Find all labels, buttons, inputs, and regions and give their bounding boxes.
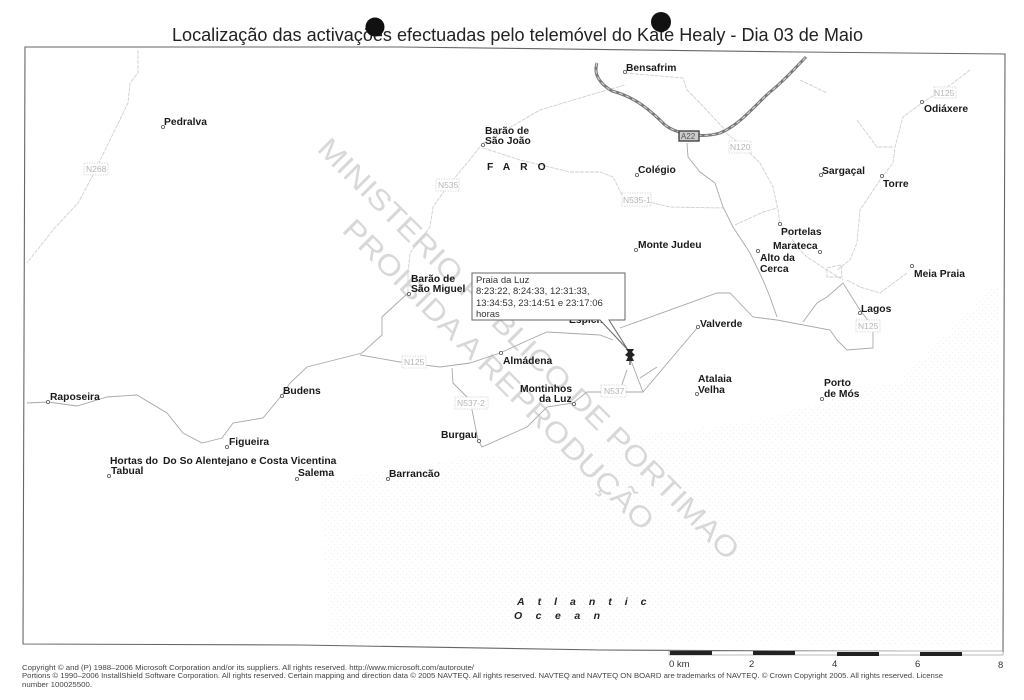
place names and markers	[46, 63, 968, 481]
title: Localização das activações efectuadas pelo telemóvel do Kate Healy - Dia 03 de Maio	[172, 24, 863, 45]
place names and markers: Barão de	[411, 274, 455, 285]
punched hole left	[366, 18, 384, 36]
copyright notice: Copyright © and (P) 1988–2006 Microsoft Corporation and/or its suppliers. All rights reserved. http://www.microsoft.com/autoroute/	[22, 663, 474, 672]
watermark: MINISTERIO PUBLICO DE PORTIMAO	[311, 132, 745, 566]
ocean label: Ocean	[514, 610, 614, 622]
road labels: N125	[858, 321, 879, 331]
callout: Praia da Luz: Praia da Luz	[476, 275, 530, 286]
place names and markers: Cerca	[760, 264, 789, 275]
speckled scan noise	[320, 280, 1000, 645]
scale bar: 6	[915, 659, 920, 670]
callout: Praia da Luz: 13:34:53, 23:14:51 e 23:17:06	[476, 298, 603, 309]
place names and markers: Bensafrim	[626, 63, 676, 74]
place names and markers: Do So Alentejano e Costa Vicentina	[163, 456, 337, 467]
ocean label: Atlantic	[516, 596, 660, 608]
place names and markers: São Miguel	[411, 284, 465, 295]
place names and markers: Budens	[283, 386, 321, 397]
place names and markers: Montinhos	[520, 384, 572, 395]
road labels: N120	[730, 142, 751, 152]
ocean label	[514, 596, 660, 622]
place names and markers: Meia Praia	[914, 269, 965, 280]
place names and markers: Barrancão	[389, 469, 440, 480]
callout: Praia da Luz	[472, 273, 628, 350]
place names and markers: Salema	[298, 468, 334, 479]
callout: Praia da Luz: horas	[476, 309, 500, 320]
place names and markers: Velha	[698, 385, 725, 396]
place names and markers: Raposeira	[50, 392, 100, 403]
place names and markers: Pedralva	[164, 117, 207, 128]
callout: Praia da Luz: 8:23:22, 8:24:33, 12:31:33,	[476, 286, 590, 297]
place names and markers: Portelas	[781, 227, 822, 238]
place names and markers: Alto da	[760, 253, 795, 264]
motorway A22	[596, 57, 806, 135]
place names and markers: Odiáxere	[924, 104, 968, 115]
place names and markers: Porto	[824, 378, 851, 389]
copyright notice	[22, 663, 943, 689]
place names and markers: Torre	[883, 179, 909, 190]
place names and markers: da Luz	[539, 394, 572, 405]
place names and markers: Barão de	[485, 126, 529, 137]
road labels: N125	[404, 357, 425, 367]
place names and markers: Burgau	[441, 430, 477, 441]
road labels: N535	[438, 180, 459, 190]
scale bar: 8	[998, 660, 1003, 671]
road labels: A22	[681, 132, 696, 141]
scale bar: 2	[749, 659, 754, 670]
road network	[27, 50, 970, 447]
punched hole right	[651, 12, 671, 32]
place names and markers: de Mós	[824, 389, 860, 400]
scale bar: 4	[832, 659, 837, 670]
place names and markers: São João	[485, 136, 531, 147]
place names and markers: FARO	[487, 162, 556, 173]
place names and markers: Hortas do	[110, 456, 158, 467]
road labels: N535-1	[623, 195, 651, 205]
place names and markers: Marateca	[773, 241, 818, 252]
road labels: N125	[934, 88, 955, 98]
place names and markers: Espiche	[569, 315, 609, 326]
road labels	[84, 87, 956, 409]
place names and markers: Tabual	[111, 466, 144, 477]
place names and markers: Almádena	[503, 356, 552, 367]
place names and markers: Monte Judeu	[638, 240, 702, 251]
road labels: N537	[604, 386, 625, 396]
road labels: N268	[86, 164, 107, 174]
place names and markers: Lagos	[861, 304, 892, 315]
copyright notice: Portions © 1990–2006 InstallShield Software Corporation. All rights reserved. Certain mapping and direction data © 2005 NAVTEQ. All rights reserved. NAVTEQ and NAVTEQ ON BOARD are trademarks of NAVTEQ. © Crown Copyright 2005. All rights reserved. License	[22, 671, 943, 680]
place names and markers: Atalaia	[698, 374, 732, 385]
scale bar	[669, 651, 1003, 671]
place names and markers: Figueira	[229, 437, 269, 448]
road labels: N537-2	[457, 398, 485, 408]
watermark: PROIBIDA A REPRODUÇÃO	[336, 212, 661, 537]
copyright notice: number 100025500.	[22, 680, 92, 689]
place names and markers: Valverde	[700, 319, 743, 330]
scale bar: 0 km	[669, 659, 690, 670]
place names and markers: Colégio	[638, 165, 676, 176]
place names and markers: Sargaçal	[822, 166, 865, 177]
icon: location pin	[625, 349, 635, 365]
